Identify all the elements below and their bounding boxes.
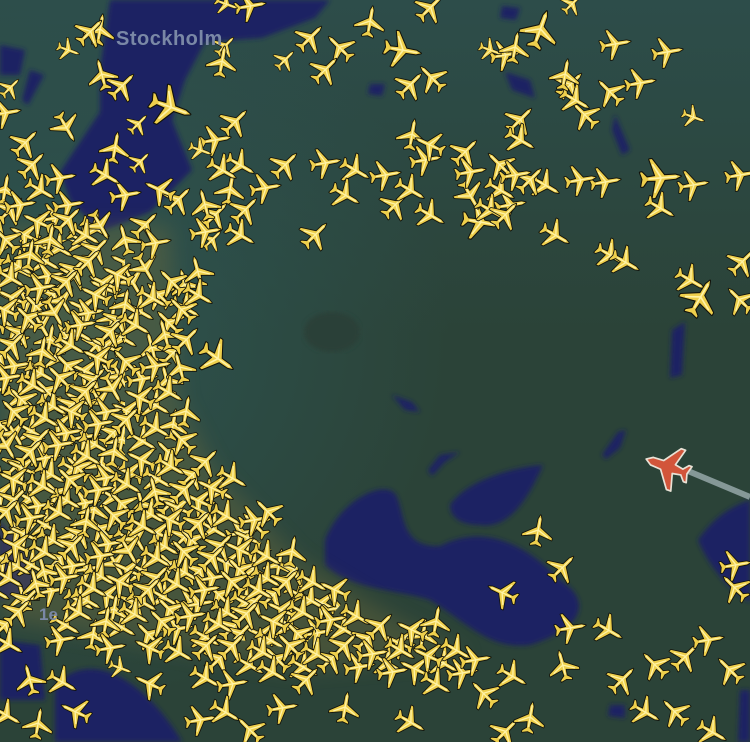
city label: fragment: 1e <box>39 605 58 624</box>
city label: Stockholm: Stockholm <box>116 28 223 50</box>
yellow glow under dense traffic <box>0 225 470 670</box>
yellow aircraft: Black Sea and Caucasus <box>482 513 750 742</box>
red highlighted aircraft with trail <box>639 439 750 497</box>
yellow aircraft: northern and central band <box>192 0 750 384</box>
yellow aircraft: Scandinavia and Baltic <box>0 10 283 260</box>
yellow aircraft: southern sparse traffic <box>0 622 548 742</box>
contrail <box>688 471 750 497</box>
red plane <box>639 439 697 495</box>
large lake marking <box>304 312 360 352</box>
yellow aircraft: dense western mass (layers) <box>0 175 501 690</box>
